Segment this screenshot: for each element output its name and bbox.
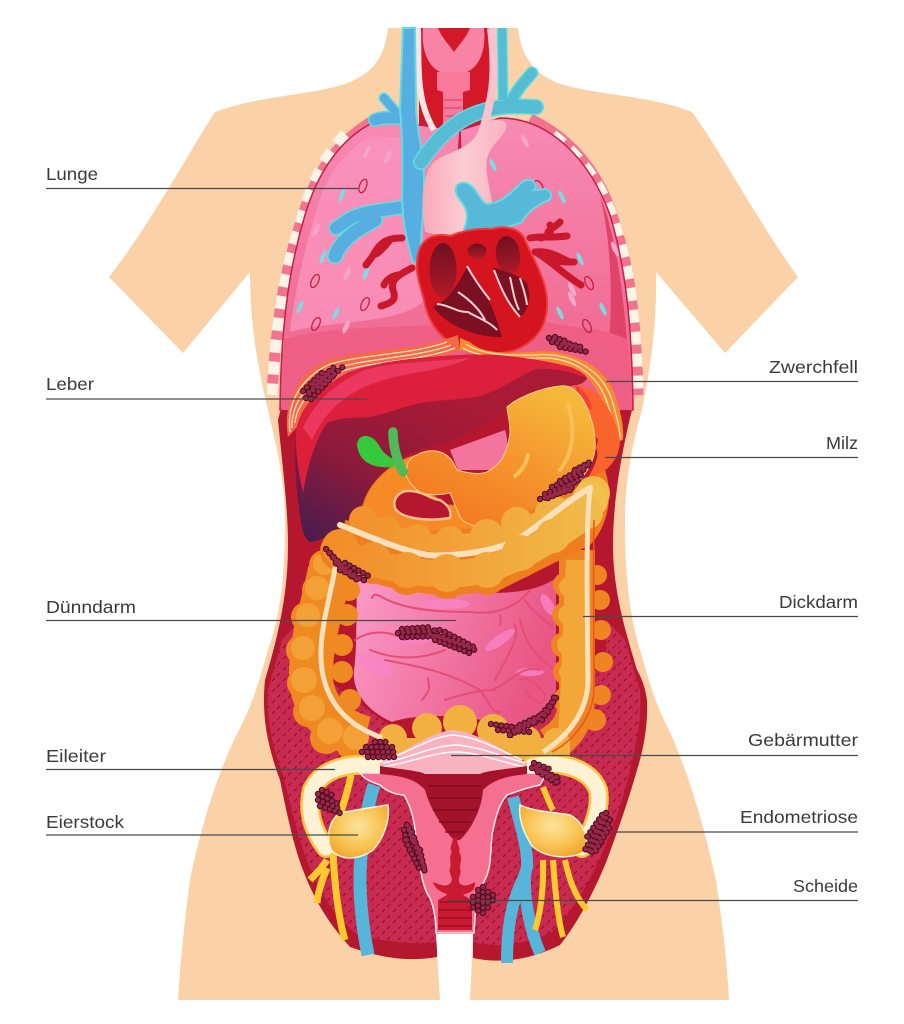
label: Dickdarm: Dickdarm <box>779 592 858 612</box>
stomach <box>406 386 595 527</box>
yellow left <box>310 775 351 940</box>
label: Endometriose: Endometriose <box>740 807 858 827</box>
bottom sigmoid colon <box>379 705 570 760</box>
descending colon right <box>550 550 613 745</box>
top-right yellow colon bulge <box>572 482 608 518</box>
right diaphragm band <box>460 338 623 442</box>
transverse colon lower row shadow <box>320 501 604 599</box>
gallbladder <box>357 432 403 472</box>
label: Gebärmutter: Gebärmutter <box>748 730 858 750</box>
veins: blue vessels left <box>335 28 424 265</box>
yellow right <box>535 787 587 937</box>
label: Eileiter: Eileiter <box>46 746 106 766</box>
larynx <box>437 72 470 140</box>
duodenum ring <box>363 455 500 536</box>
side dotted fill right <box>606 620 640 720</box>
transverse colon lower row <box>322 497 603 592</box>
colon band right <box>543 490 590 752</box>
lower lobe dark right side <box>600 195 630 400</box>
left lung <box>280 120 460 410</box>
rib band left <box>272 119 376 395</box>
side dotted fill left <box>268 620 300 720</box>
aorta <box>423 120 507 240</box>
heart <box>417 227 547 353</box>
maroon upper band <box>380 766 527 840</box>
right lung <box>460 118 633 410</box>
lighter left upper lobe <box>290 136 425 332</box>
pink window between liver and stomach <box>450 430 507 470</box>
small intestine <box>354 575 558 728</box>
endometriosis clusters <box>303 337 610 917</box>
uterus <box>360 730 547 933</box>
abdominal cavity <box>264 380 647 961</box>
atria chambers <box>430 243 456 297</box>
pale neck artery <box>418 28 434 130</box>
lower peritoneum dotted fill left <box>268 660 437 943</box>
lower peritoneum dotted fill right <box>473 660 640 945</box>
ventricle muscle <box>433 267 502 337</box>
muscle cap <box>380 730 527 775</box>
transverse colon base <box>340 470 609 590</box>
ovary left <box>329 805 388 858</box>
thyroid <box>423 28 484 72</box>
central vein <box>400 28 424 265</box>
cervix canal <box>433 838 475 930</box>
liver pink highlight <box>303 358 470 440</box>
uterine body <box>360 773 547 933</box>
body silhouette <box>109 28 798 1000</box>
label: Lunge: Lunge <box>46 164 98 184</box>
label: Scheide: Scheide <box>793 876 858 896</box>
left diaphragm band <box>287 335 460 437</box>
label: Zwerchfell: Zwerchfell <box>769 357 858 377</box>
label: Eierstock: Eierstock <box>46 812 124 832</box>
cream band across the colon <box>340 488 590 555</box>
white vaginal opening <box>436 934 473 1000</box>
ovary right <box>520 805 586 857</box>
colon band left <box>321 567 382 738</box>
large intestine <box>286 470 613 761</box>
ascending colon left <box>286 550 369 761</box>
label: Milz: Milz <box>826 433 858 453</box>
lung base <box>282 320 632 410</box>
label: Leber: Leber <box>46 374 94 394</box>
stomach shine <box>515 405 573 476</box>
lung spots <box>311 134 621 334</box>
fallopian tubes <box>310 764 599 848</box>
spleen <box>574 385 620 478</box>
left tube <box>310 765 378 848</box>
liver bright upper <box>296 355 587 493</box>
transverse colon upper row <box>349 476 610 556</box>
lungs <box>280 118 633 410</box>
blue right <box>507 797 540 963</box>
diaphragm <box>287 335 623 442</box>
label: Dünndarm: Dünndarm <box>46 597 136 617</box>
right tube <box>532 764 599 848</box>
veins: blue vessels right <box>421 28 536 162</box>
lung red vessels <box>366 222 581 306</box>
neck: red throat <box>419 28 490 148</box>
pale right carotid artery <box>478 28 494 145</box>
pelvis nerves and vessels <box>310 775 587 963</box>
rib band right <box>530 119 638 395</box>
pulmonary artery <box>456 180 551 235</box>
liver <box>295 355 587 542</box>
blue left <box>360 785 374 955</box>
